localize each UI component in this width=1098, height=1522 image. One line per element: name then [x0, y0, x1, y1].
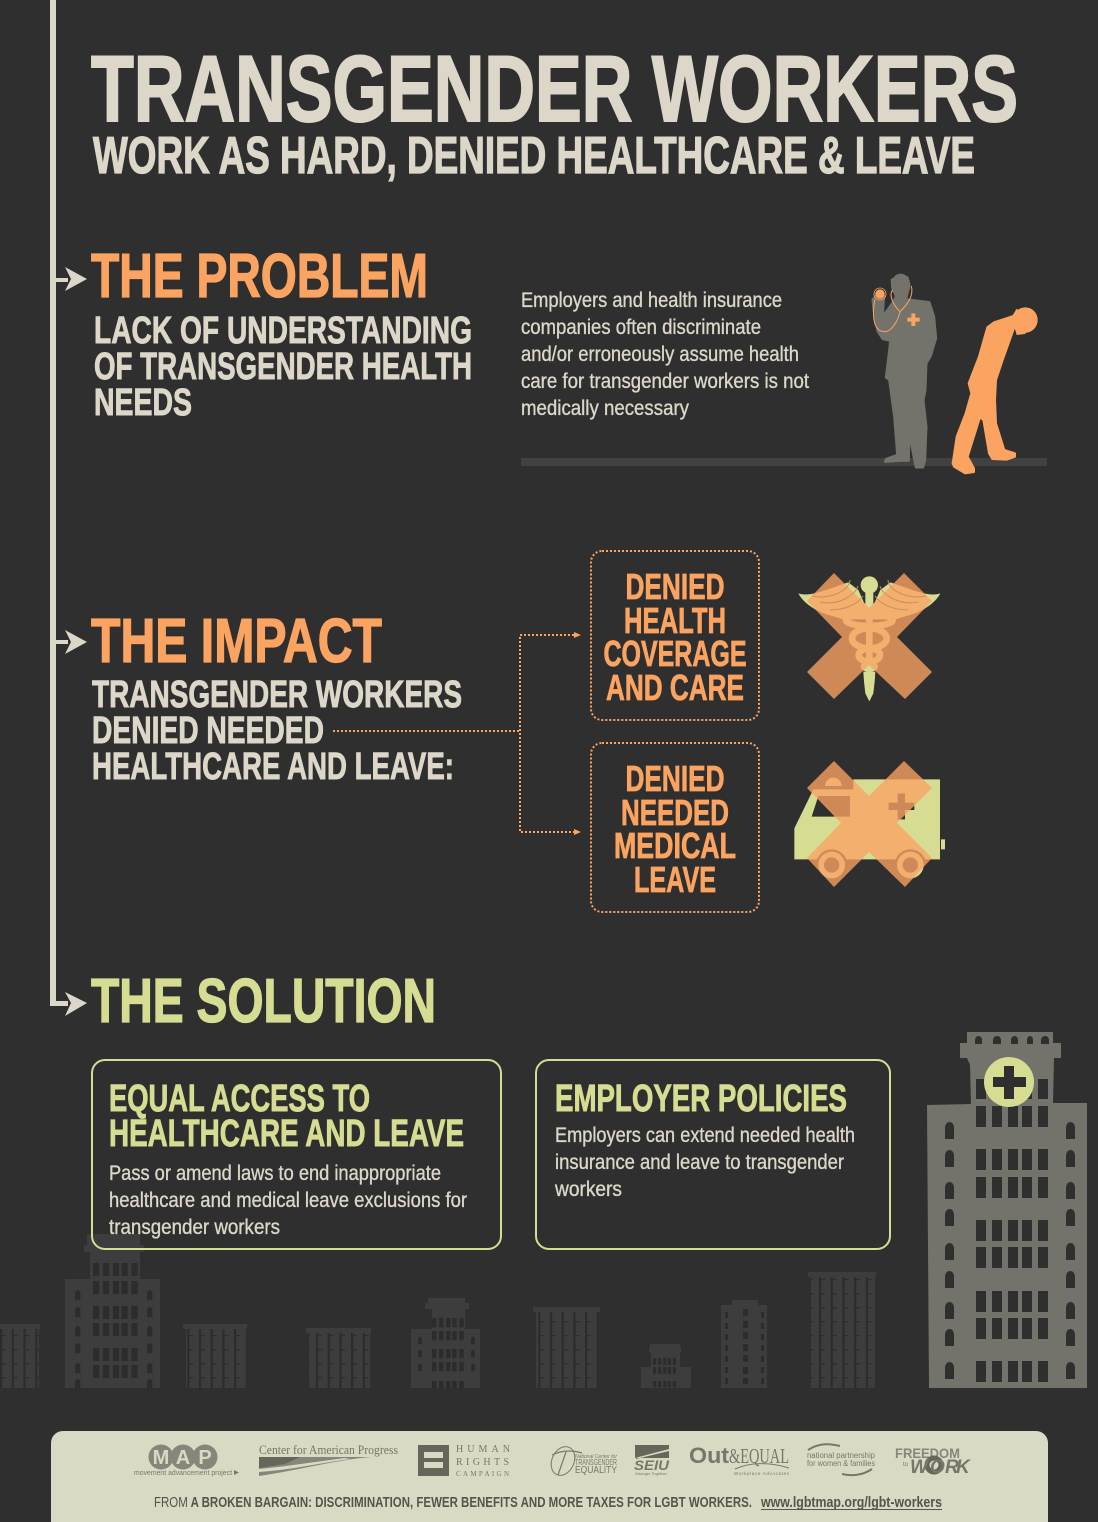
logo: out and equal: &EQUAL [729, 1444, 789, 1468]
logo: national partnership [807, 1444, 876, 1475]
logo: human rights campaign: HUMAN [456, 1444, 510, 1455]
problem description text: Employers and health insurance [521, 289, 782, 312]
illustration: doctor and bowed patient [521, 274, 1047, 473]
dotted connector arrows [333, 632, 581, 835]
building: large hospital left [65, 1234, 160, 1389]
panel: equal access: Pass or amend laws to end inappropriate [109, 1162, 441, 1185]
box: denied medical leave: NEEDED [621, 792, 729, 833]
heading: the problem: NEEDS [94, 382, 192, 424]
box: denied medical leave: MEDICAL [614, 825, 736, 866]
logo: human rights campaign: CAMPAIGN [456, 1470, 509, 1478]
logo: movement advancement project: movement advancement project [134, 1470, 232, 1477]
building: tall slab right [808, 1272, 876, 1388]
problem description text: companies often discriminate [521, 316, 761, 339]
logo: national center for transgender equality: EQUALITY [575, 1464, 617, 1476]
logo: movement advancement project: M [153, 1447, 169, 1469]
building: slab 3 [306, 1328, 371, 1388]
box: denied health coverage: AND CARE [606, 667, 744, 708]
heading: the problem [91, 242, 472, 424]
panel: employer policies: Employers can extend needed health [555, 1124, 855, 1147]
building: tower [721, 1300, 767, 1388]
logo: seiu: Stronger Together [635, 1471, 668, 1476]
logo: national center for transgender equality [547, 1443, 618, 1479]
box: denied health coverage: DENIED [626, 566, 724, 607]
logo: seiu: SEIU [634, 1457, 670, 1473]
heading: the impact: HEALTHCARE AND LEAVE: [92, 746, 454, 788]
building: slab 4 [533, 1307, 600, 1388]
building: slab far left [0, 1324, 40, 1388]
heading: the solution: THE SOLUTION [91, 967, 436, 1036]
panel: employer policies: workers [554, 1178, 622, 1201]
panel: equal access: EQUAL ACCESS TO [109, 1078, 370, 1120]
skyline background buildings [0, 1234, 876, 1389]
footer citation: www.lgbtmap.org/lgbt-workers [760, 1495, 942, 1511]
icon: crossed-out ambulance [794, 761, 945, 887]
heading: the problem: OF TRANSGENDER HEALTH [94, 346, 472, 388]
logo: national partnership: for women & families [807, 1459, 875, 1468]
problem description text: medically necessary [521, 397, 689, 420]
panel: employer policies [536, 1060, 890, 1249]
box: denied health coverage: HEALTH [624, 600, 726, 641]
panel: employer policies: insurance and leave to transgender [555, 1151, 844, 1174]
logo: freedom to work: FREEDOM [895, 1445, 960, 1461]
building: tiny hospital [641, 1344, 691, 1388]
heading: the problem: LACK OF UNDERSTANDING [94, 310, 472, 352]
box: denied medical leave [591, 743, 759, 912]
vertical timeline with arrows [50, 0, 87, 1016]
icon: crossed-out caduceus [798, 573, 940, 701]
logo: freedom to work: to [903, 1462, 909, 1468]
logo: seiu [634, 1445, 670, 1476]
box: denied health coverage: COVERAGE [604, 633, 746, 674]
logo: movement advancement project: A [176, 1447, 190, 1469]
footer citation: FROM A BROKEN BARGAIN: DISCRIMINATION, FEWER BENEFITS AND MORE TAXES FOR LGBT WORKERS. [154, 1495, 752, 1511]
problem description text [521, 289, 809, 420]
box: denied medical leave: DENIED [626, 758, 724, 799]
logo: freedom to work [895, 1445, 971, 1478]
box: denied medical leave: LEAVE [634, 859, 716, 900]
logo: freedom to work: WORK [910, 1457, 971, 1478]
logo: national center for transgender equality: National Center for [575, 1454, 618, 1460]
heading: the impact: DENIED NEEDED [92, 710, 324, 752]
panel: employer policies: EMPLOYER POLICIES [555, 1078, 847, 1120]
building: small hospital [411, 1298, 480, 1388]
logo: movement advancement project: P [198, 1447, 212, 1469]
panel: footer [51, 1431, 1048, 1522]
logo: center for american progress [259, 1443, 398, 1476]
logo: national center for transgender equality: TRANSGENDER [575, 1458, 617, 1467]
panel: equal access: HEALTHCARE AND LEAVE [109, 1113, 464, 1155]
logo: center for american progress: Center for American Progress [259, 1443, 398, 1457]
logo: national partnership: national partnership [807, 1451, 876, 1460]
panel: equal access: transgender workers [109, 1216, 280, 1239]
heading: the problem: THE PROBLEM [91, 242, 428, 311]
heading: the impact: THE IMPACT [91, 607, 382, 676]
problem description text: care for transgender workers is not [521, 370, 809, 393]
heading: the impact: TRANSGENDER WORKERS [92, 674, 462, 716]
box: denied health coverage [591, 551, 759, 720]
logo: out and equal: Out [689, 1443, 730, 1468]
logo: movement advancement project [134, 1444, 239, 1477]
panel: equal access [92, 1060, 501, 1249]
problem description text: and/or erroneously assume health [521, 343, 799, 366]
heading: the impact [91, 607, 462, 788]
logo: out and equal [689, 1443, 790, 1476]
icon: hospital building [927, 1032, 1087, 1388]
panel: equal access: healthcare and medical leave exclusions for [109, 1189, 467, 1212]
logo: human rights campaign: RIGHTS [456, 1457, 509, 1468]
logo: out and equal: Workplace Advocates [734, 1471, 790, 1476]
building: slab 2 [183, 1324, 247, 1388]
title [91, 36, 1018, 185]
logo: human rights campaign [418, 1444, 510, 1478]
